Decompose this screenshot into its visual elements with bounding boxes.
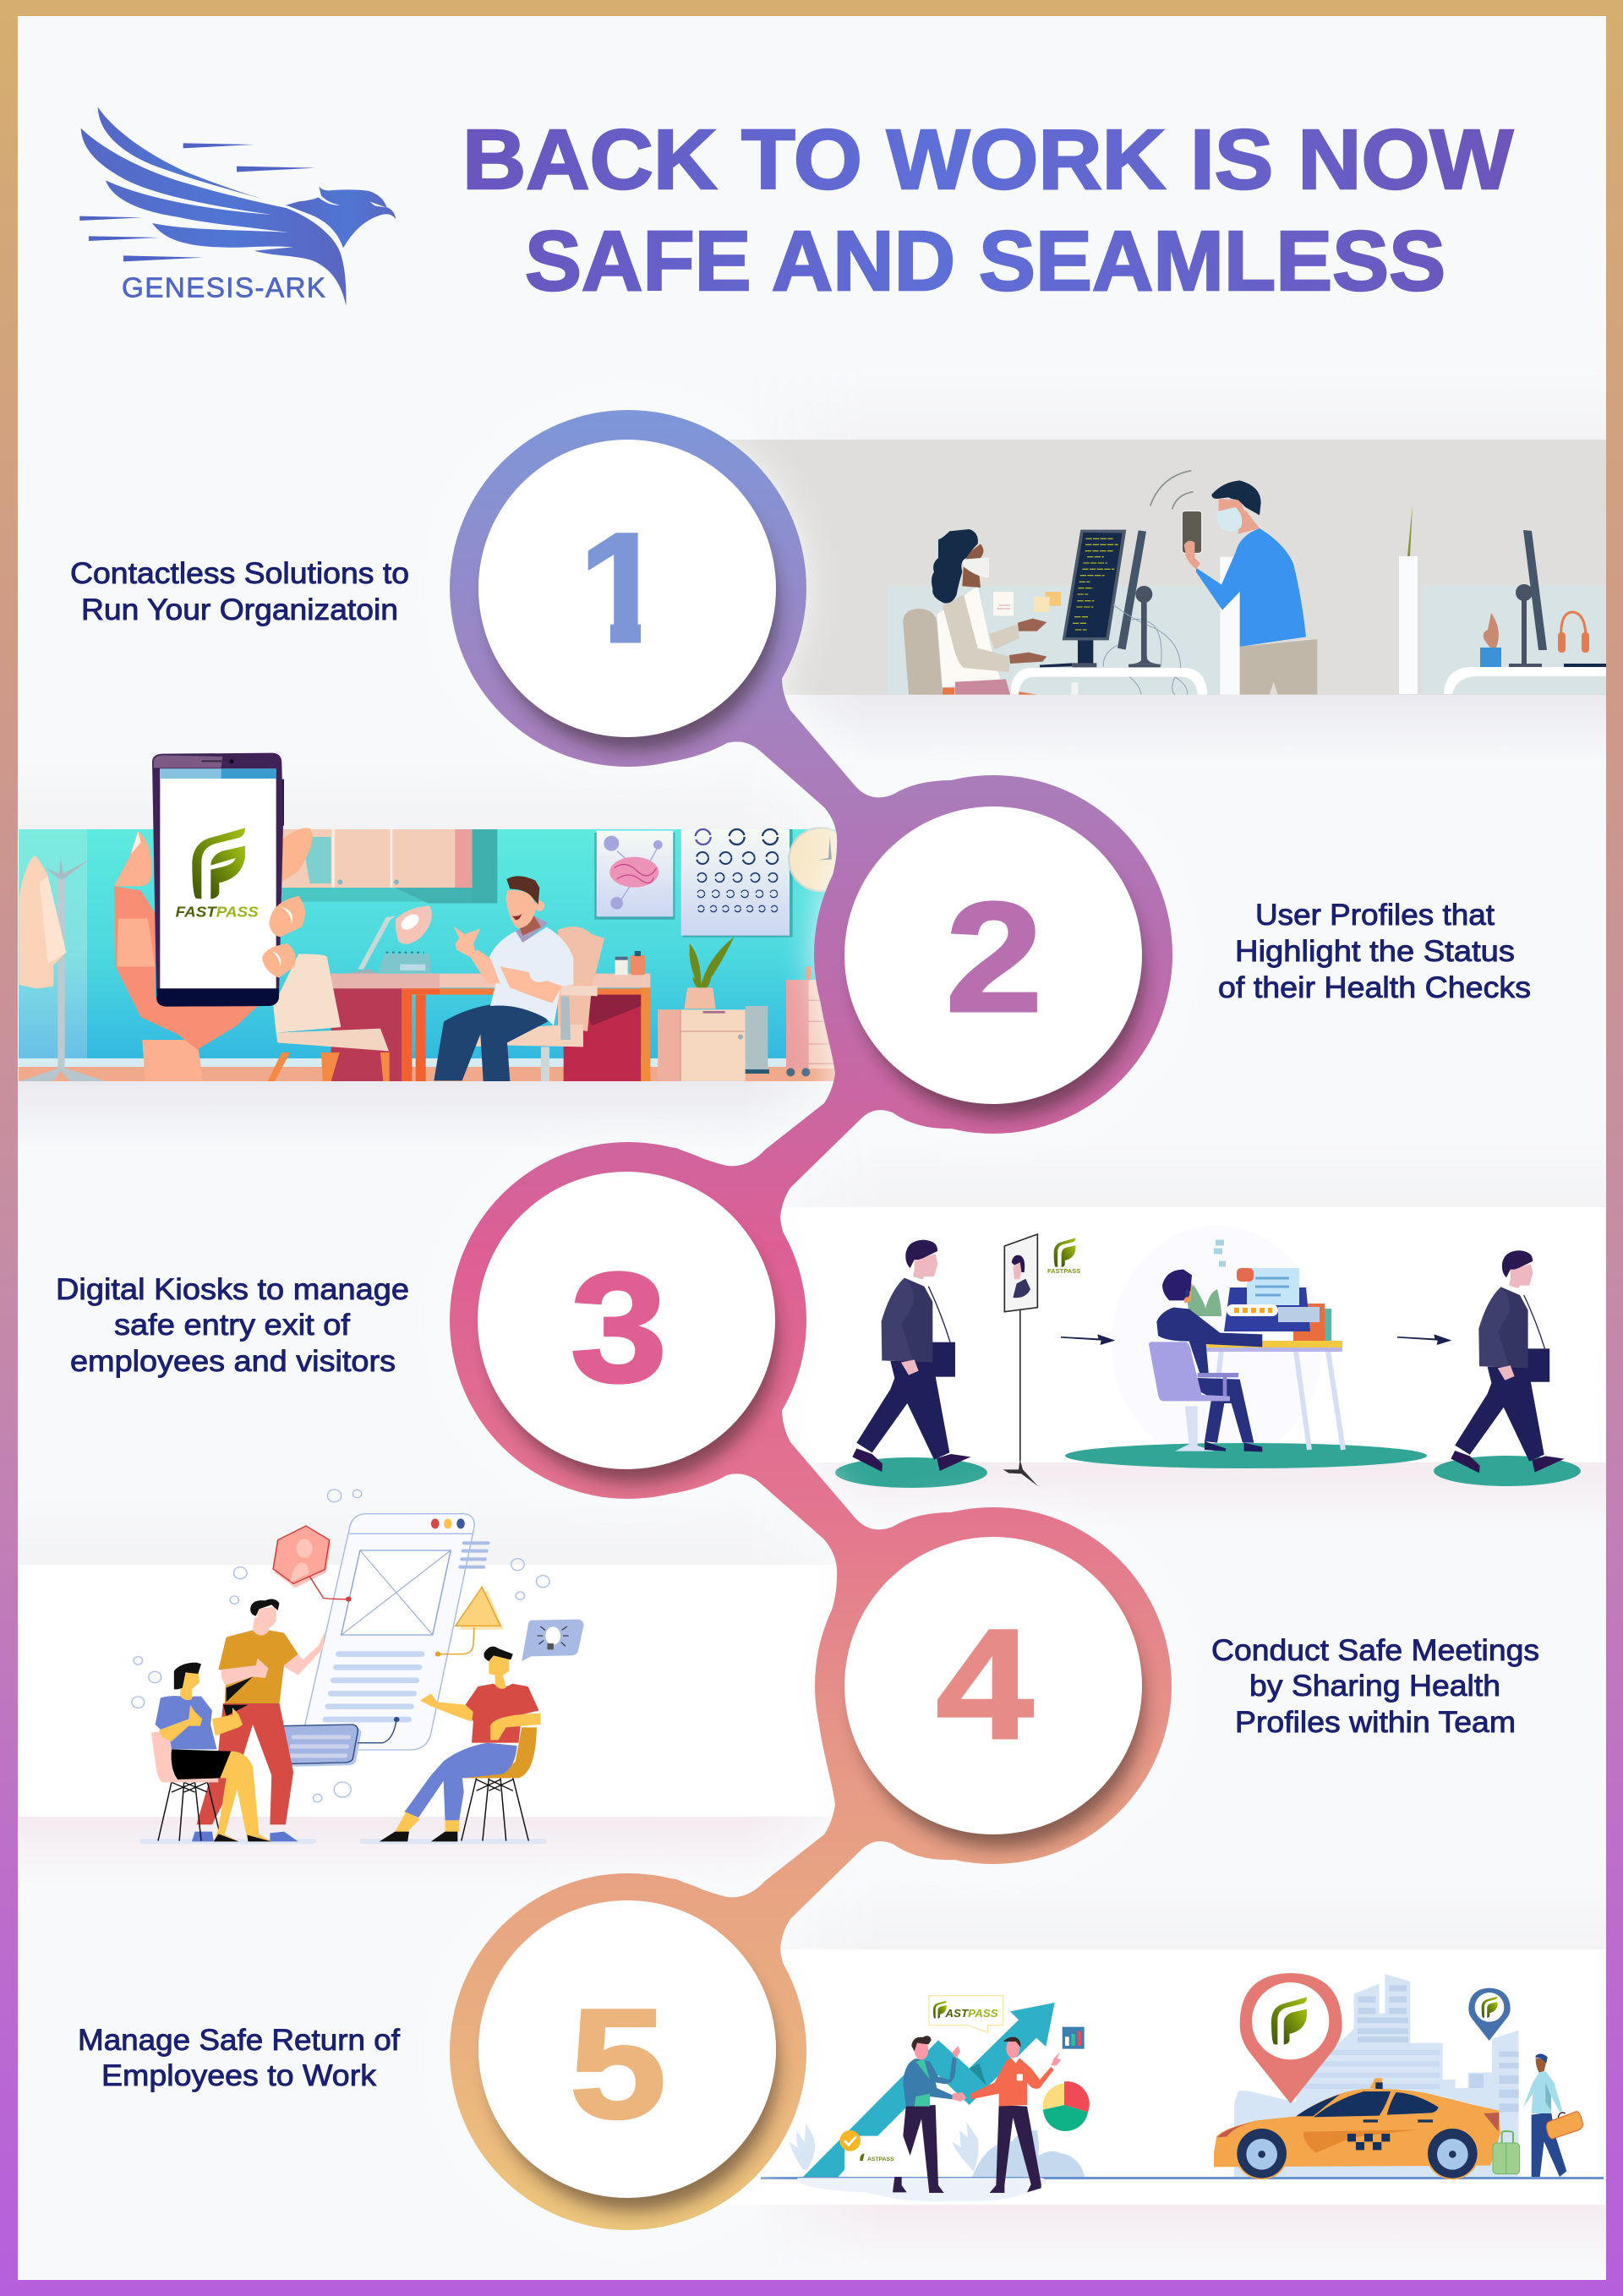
coat rack with coat: [19, 856, 106, 1081]
arrow 1: [1061, 1334, 1115, 1345]
label: step 2 text: Highlight the Status: [1235, 935, 1515, 968]
people at the left desk: [888, 471, 1317, 695]
wireframe window: [304, 1514, 489, 1750]
label: step 4 text: Conduct Safe Meetings: [1211, 1634, 1539, 1667]
hand holding phone: [114, 828, 313, 1081]
fingers on phone: [131, 831, 305, 978]
visitor chair: [268, 954, 390, 1081]
suitcase: [1493, 2131, 1520, 2174]
businessman right: [970, 2037, 1061, 2193]
right cabinet: [786, 966, 839, 1076]
label: step 1 text: Contactless Solutions to: [70, 557, 409, 590]
trash can: [746, 1006, 769, 1074]
step 1 circle: [478, 440, 776, 737]
right desk with monitor, plant and headphones: [1444, 530, 1606, 694]
plant: [684, 937, 734, 1009]
title: [462, 112, 1514, 309]
step 5 circle: 5: [570, 1977, 666, 2151]
fastpass speech box: ASTPASS: [944, 2008, 998, 2020]
hand and phone scene: [19, 753, 472, 1081]
man's office scene: [331, 828, 852, 1081]
ring shape: [450, 410, 1172, 2230]
ground blob: [797, 2178, 1046, 2201]
ground strips: [139, 1839, 546, 1844]
yellow taxi: [1214, 2078, 1500, 2179]
desk items: [1188, 1243, 1331, 1343]
eagle eye: [369, 201, 386, 208]
label: step 1 text: [70, 557, 409, 626]
label: step 4 text: [1211, 1634, 1539, 1739]
approval badge: [839, 2130, 861, 2151]
woman at computer: [932, 529, 1046, 695]
computer monitor: [1040, 530, 1146, 667]
label: step 3 text: [56, 1273, 409, 1378]
traveller with bag: [1520, 2054, 1583, 2177]
speed lines: [79, 143, 315, 261]
pale plants and hills: [789, 2122, 1085, 2177]
label: step 3 text: employees and visitors: [70, 1345, 396, 1378]
panel 1 wall: [719, 440, 1606, 695]
warning triangle: [435, 1587, 504, 1657]
profile hexagon: [273, 1526, 352, 1602]
panel 2 wall: [19, 829, 879, 1081]
walking person exiting: [1451, 1250, 1565, 1473]
label: step 5 text: Employees to Work: [101, 2059, 377, 2092]
title: BACK TO WORK IS NOW: [462, 112, 1514, 207]
wall clock: [789, 828, 852, 891]
contactless waves: [1150, 471, 1194, 509]
eagle wing and tail: [81, 128, 346, 306]
label: step 2 text: User Profiles that: [1255, 899, 1495, 932]
label: step 3 text: safe entry exit of: [114, 1309, 350, 1342]
step 4 circle: 4: [937, 1598, 1033, 1772]
step 2 circle: 2: [945, 871, 1043, 1045]
panel 3: digital kiosk illustration: [727, 1207, 1606, 1488]
decorative bubbles: [132, 1490, 549, 1802]
panel 4: team meeting illustration: [19, 1490, 879, 1844]
panel 1: contactless office illustration: [719, 440, 1606, 695]
connected ring timeline: [450, 410, 1172, 2230]
logo: Genesis-Ark: [79, 107, 396, 306]
businessman left: [893, 2036, 966, 2193]
fastpass wordmark: FASTPASS: [176, 903, 259, 920]
receptionist: [1149, 1270, 1262, 1451]
small fastpass mark: [860, 2153, 894, 2162]
label: step 4 text: by Sharing Health: [1249, 1670, 1500, 1703]
pie chart: [1043, 2081, 1090, 2131]
seated woman: [151, 1663, 271, 1841]
label: step 5 text: Manage Safe Return of: [78, 2024, 400, 2057]
step 2 circle: [844, 806, 1142, 1104]
panel 5 background: [719, 1949, 1606, 2205]
cupboard shadow: [395, 829, 497, 903]
label: step 4 text: Profiles within Team: [1235, 1706, 1516, 1739]
ground line: [761, 2177, 1604, 2179]
kiosk stand: [1003, 1234, 1038, 1486]
fastpass logo mark: [192, 828, 245, 899]
eagle head: [286, 187, 396, 248]
label: step 2 text: of their Health Checks: [1218, 971, 1531, 1004]
rising arrow: [803, 2003, 1055, 2177]
seated man: [380, 1647, 540, 1841]
city skyline: [1234, 1974, 1519, 2177]
eagle wing feather: [98, 107, 265, 200]
desk left: [331, 974, 440, 1081]
partition: [888, 586, 1220, 695]
step 5 circle: [478, 1900, 776, 2198]
ground ellipses: [835, 1443, 1581, 1488]
blue location pin: [1468, 1988, 1511, 2041]
step 3 circle: 3: [570, 1241, 668, 1415]
arrow 2: [1397, 1334, 1451, 1345]
bottles on desk: [615, 951, 645, 975]
monitor stand and cables: [1103, 586, 1188, 695]
man holding phone: [1182, 480, 1317, 695]
title: SAFE AND SEAMLESS: [525, 214, 1445, 309]
cupboards and shelf: [281, 829, 472, 902]
info card: [275, 1717, 400, 1767]
desk leg and post: [1071, 682, 1078, 695]
pale backdrop circle: [1112, 1226, 1323, 1462]
smartphone: [152, 753, 284, 1007]
step 4 circle: [844, 1537, 1142, 1834]
idea speech bubble: [522, 1620, 583, 1661]
seated receptionist and desk: [1149, 1243, 1343, 1451]
divider post: [1220, 557, 1240, 695]
desk: [331, 974, 650, 1081]
step 1 circle: 1: [579, 501, 665, 675]
panel 5: safe return illustration: [719, 1949, 1606, 2205]
calendar: [378, 953, 431, 973]
panel 3 background: [727, 1207, 1606, 1462]
brain poster: [594, 831, 675, 920]
taxi scene: [1214, 1973, 1583, 2179]
right partition and post: [1399, 505, 1606, 694]
walking person entering: [852, 1240, 970, 1472]
ring inner shadows: [489, 463, 1144, 2211]
panel 2 lighter wall section: [19, 829, 87, 1059]
fastpass logo on kiosk: [1047, 1238, 1081, 1275]
desk lamp: [347, 906, 432, 974]
panel 4 background: [19, 1565, 879, 1817]
red location pin: [1240, 1973, 1342, 2103]
small fastpass mark: ASTPASS: [867, 2157, 894, 2162]
fold of arrow: [970, 2064, 986, 2086]
growth scene: [789, 1996, 1090, 2201]
desk top and legs: [1205, 1341, 1343, 1450]
eye chart: [681, 829, 793, 938]
skyline windows: [1304, 1985, 1519, 2112]
white desk: [1010, 668, 1207, 695]
label: step 2 text: [1218, 899, 1531, 1004]
standing man: [192, 1599, 325, 1841]
office chair: [903, 609, 943, 695]
step 3 circle: [478, 1172, 775, 1469]
label: step 5 text: [78, 2024, 400, 2092]
fastpass logo on kiosk: FASTPASS: [1047, 1269, 1081, 1275]
fastpass speech box: [929, 1996, 1003, 2032]
seated doctor: [434, 876, 573, 1081]
logo wordmark: GENESIS-ARK: [122, 273, 325, 304]
baseboard and floor: [19, 1058, 879, 1081]
panel 2: health profile illustration: [19, 753, 879, 1081]
ring soft halo: [450, 410, 1172, 2230]
office chair: [463, 927, 604, 1081]
drawer cabinet: [658, 1009, 746, 1081]
label: step 3 text: Digital Kiosks to manage: [56, 1273, 409, 1306]
bar chart icon: [1063, 2027, 1085, 2049]
clipboard and sticky notes: [993, 592, 1061, 615]
label: step 1 text: Run Your Organizatoin: [81, 593, 398, 626]
